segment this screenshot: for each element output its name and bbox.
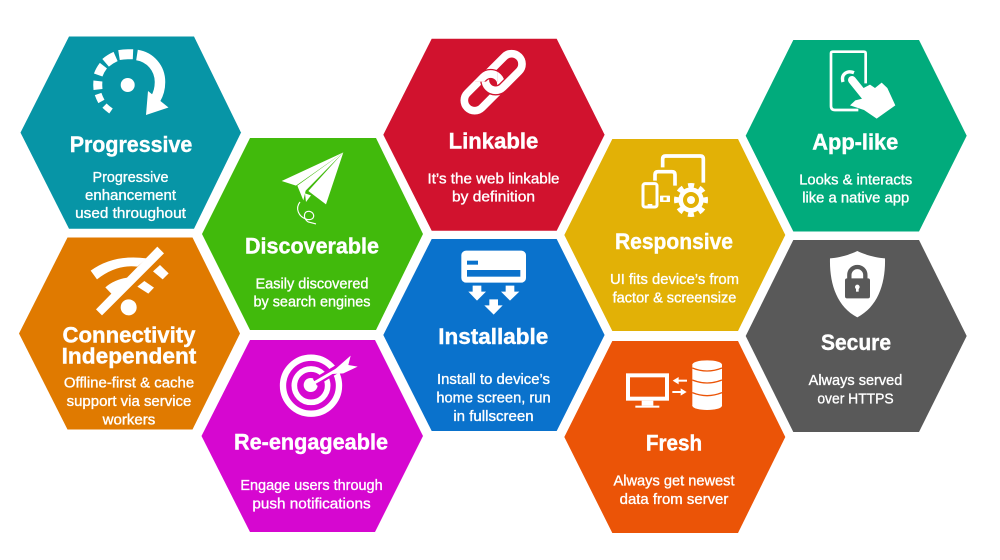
title: Re-engageable xyxy=(234,429,388,454)
description xyxy=(809,373,902,407)
description: It’s the web linkable xyxy=(428,171,560,187)
panel: Linkable xyxy=(383,39,605,231)
description: in fullscreen xyxy=(453,409,534,425)
description: Always served xyxy=(809,373,902,389)
description: Engage users through xyxy=(240,478,383,494)
panel: Secure xyxy=(746,240,967,432)
title: Independent xyxy=(62,343,197,368)
description: factor & screensize xyxy=(613,290,736,306)
description xyxy=(240,478,383,512)
title: Linkable xyxy=(449,128,538,153)
description xyxy=(610,272,739,306)
description: Looks & interacts xyxy=(799,172,912,188)
icon: wifi crossed out xyxy=(91,247,169,315)
title: Responsive xyxy=(615,229,733,254)
panel: Installable xyxy=(383,239,605,431)
icon: progress arc with arrow xyxy=(98,54,168,115)
hexagon: gray xyxy=(746,240,967,432)
description xyxy=(254,276,370,311)
panel: Fresh xyxy=(564,341,785,533)
description: by search engines xyxy=(254,295,370,311)
title xyxy=(62,322,197,368)
hexagon: emerald xyxy=(746,40,967,232)
icon: install unit with down arrows xyxy=(461,251,526,315)
description: home screen, run xyxy=(436,390,551,406)
description: used throughout xyxy=(75,206,186,222)
description xyxy=(436,372,551,425)
description xyxy=(614,474,734,508)
panel: App-like xyxy=(746,40,967,232)
description: workers xyxy=(102,412,155,428)
icon: target with arrow xyxy=(283,356,358,414)
title: Fresh xyxy=(646,431,702,456)
title: Discoverable xyxy=(245,233,379,258)
hexagon: magenta xyxy=(202,340,423,532)
description: by definition xyxy=(452,190,535,206)
description xyxy=(64,375,194,428)
hexagon: orange xyxy=(19,238,240,430)
description: push notifications xyxy=(252,496,371,512)
description: like a native app xyxy=(802,191,909,207)
panel: Re-engageable xyxy=(202,340,423,532)
panel: Responsive xyxy=(564,139,785,331)
description: over HTTPS xyxy=(817,391,894,407)
hexagon: yellow xyxy=(564,139,785,331)
hexagon: coral xyxy=(564,341,785,533)
description: data from server xyxy=(620,492,728,508)
hexagon: blue xyxy=(383,239,605,431)
icon: hand tapping phone xyxy=(831,52,895,119)
icon: monitor syncing with database xyxy=(628,360,722,410)
title: Secure xyxy=(821,330,891,355)
description xyxy=(428,171,560,206)
description xyxy=(799,172,912,207)
hexagon: teal xyxy=(20,36,241,229)
description: Always get newest xyxy=(614,474,734,490)
description: enhancement xyxy=(85,188,176,204)
title: Connectivity xyxy=(62,322,196,347)
description: UI fits device’s from xyxy=(610,272,739,288)
panel: Progressive xyxy=(20,36,241,229)
description: Offline-first & cache xyxy=(64,375,194,391)
title: Progressive xyxy=(70,132,192,157)
title: Installable xyxy=(438,324,548,349)
description: Easily discovered xyxy=(256,276,368,292)
icon: paper plane xyxy=(282,152,343,224)
hexagon: red xyxy=(383,39,605,231)
description xyxy=(75,170,186,222)
icon: shield with padlock xyxy=(830,251,885,317)
description: support via service xyxy=(67,394,191,410)
panel: Connectivity Independent xyxy=(19,238,240,430)
icon: devices and gear xyxy=(643,156,706,215)
description: Progressive xyxy=(92,170,168,186)
title: App-like xyxy=(812,129,898,154)
icon: chain links xyxy=(460,49,526,115)
description: Install to device’s xyxy=(437,372,550,388)
panel: Discoverable xyxy=(202,138,423,330)
hexagon: green xyxy=(202,138,423,330)
